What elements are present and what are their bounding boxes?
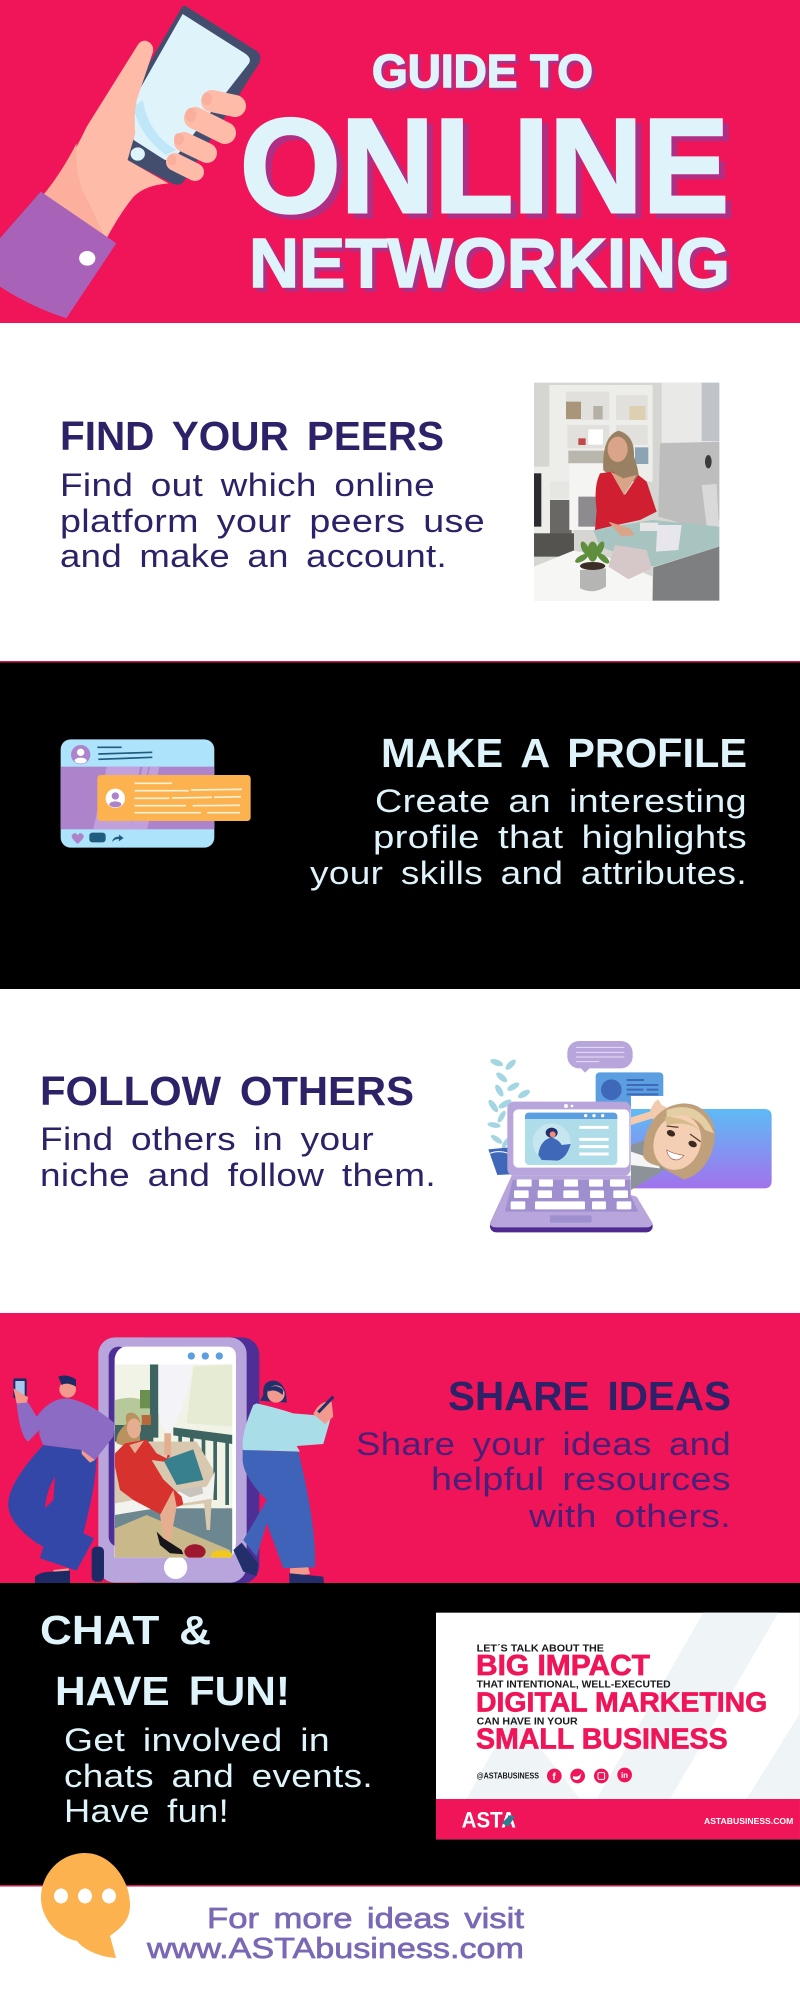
figure: man with phone: [8, 1375, 115, 1583]
title: Guide to: GUIDE TO: [372, 45, 593, 97]
panel: follow others: [0, 989, 800, 1313]
heading: follow others: FOLLOW OTHERS: [40, 1068, 414, 1114]
panel: footer: [0, 1853, 800, 2000]
text block: share ideas: [356, 1426, 731, 1534]
panel: header: [0, 0, 800, 323]
heading: chat and have fun: CHAT &: [40, 1607, 211, 1653]
text block: make a profile: [310, 783, 747, 891]
banner: ASTA digital marketing ad: ASTA: [462, 1808, 516, 1833]
banner: ASTA digital marketing ad: BIG IMPACT: [476, 1650, 650, 1682]
illustration: laptop with avatar: [487, 1041, 772, 1232]
heading: make a profile: MAKE A PROFILE: [381, 730, 747, 776]
banner: ASTA digital marketing ad: DIGITAL MARKETING: [476, 1687, 767, 1718]
text block: find your peers: and make an account.: [60, 538, 447, 574]
banner: ASTA digital marketing ad: [436, 1613, 800, 1839]
text block: chat and have fun: chats and events.: [64, 1758, 373, 1794]
panel: chat and have fun: [0, 1583, 800, 1886]
text block: find your peers: [60, 467, 485, 574]
panel: find your peers: [0, 323, 800, 662]
icon: hand holding phone: [0, 6, 260, 318]
text block: follow others: niche and follow them.: [40, 1157, 436, 1193]
photo: woman at desk: [534, 383, 719, 601]
banner: ASTA digital marketing ad: @ASTABUSINESS: [477, 1772, 540, 1781]
text block: share ideas: with others.: [528, 1498, 731, 1534]
panel: make a profile: [0, 661, 800, 989]
heading: find your peers: FIND YOUR PEERS: [60, 413, 444, 459]
text block: make a profile: Create an interesting: [375, 783, 747, 819]
title: Online: ONLINE: [240, 92, 729, 241]
icons: social media: in: [621, 1771, 628, 1780]
icons: social media: [547, 1768, 632, 1783]
text block: follow others: Find others in your: [40, 1121, 374, 1157]
icons: social media: f: [552, 1772, 556, 1783]
banner: ASTA digital marketing ad: THAT INTENTIONAL, WELL-EXECUTED: [477, 1679, 671, 1690]
banner: ASTA digital marketing ad: ASTABUSINESS.COM: [704, 1816, 793, 1826]
icon: social media post: [61, 739, 251, 848]
text block: website call to action: www.ASTAbusiness.com: [146, 1933, 524, 1965]
text block: make a profile: your skills and attributes.: [310, 855, 747, 891]
photo: woman in red dress on porch: [115, 1364, 232, 1560]
heading: chat and have fun: [40, 1607, 290, 1714]
text block: make a profile: profile that highlights: [373, 819, 747, 855]
text block: follow others: [40, 1121, 436, 1193]
illustration: people with giant phone: [8, 1337, 333, 1583]
text block: chat and have fun: [64, 1722, 373, 1829]
text block: find your peers: platform your peers use: [60, 503, 485, 539]
title: Networking: NETWORKING: [249, 224, 730, 302]
text block: website call to action: For more ideas visit: [207, 1903, 524, 1935]
text block: share ideas: helpful resources: [431, 1461, 731, 1497]
text block: find your peers: Find out which online: [60, 467, 435, 503]
icon: orange speech bubble: [41, 1853, 130, 1958]
text block: chat and have fun: Have fun!: [64, 1793, 229, 1829]
banner: ASTA digital marketing ad: LET´S TALK ABOUT THE: [477, 1644, 604, 1655]
panel: share ideas: [0, 1313, 800, 1583]
text block: chat and have fun: Get involved in: [64, 1722, 330, 1758]
heading: share ideas: SHARE IDEAS: [448, 1373, 731, 1419]
text block: share ideas: Share your ideas and: [356, 1426, 731, 1462]
banner: ASTA digital marketing ad: SMALL BUSINESS: [476, 1723, 728, 1755]
figure: woman with phone: [233, 1381, 333, 1583]
banner: ASTA digital marketing ad: CAN HAVE IN YOUR: [477, 1716, 578, 1727]
heading: chat and have fun: HAVE FUN!: [55, 1668, 290, 1714]
text block: website call to action: [146, 1903, 524, 1965]
